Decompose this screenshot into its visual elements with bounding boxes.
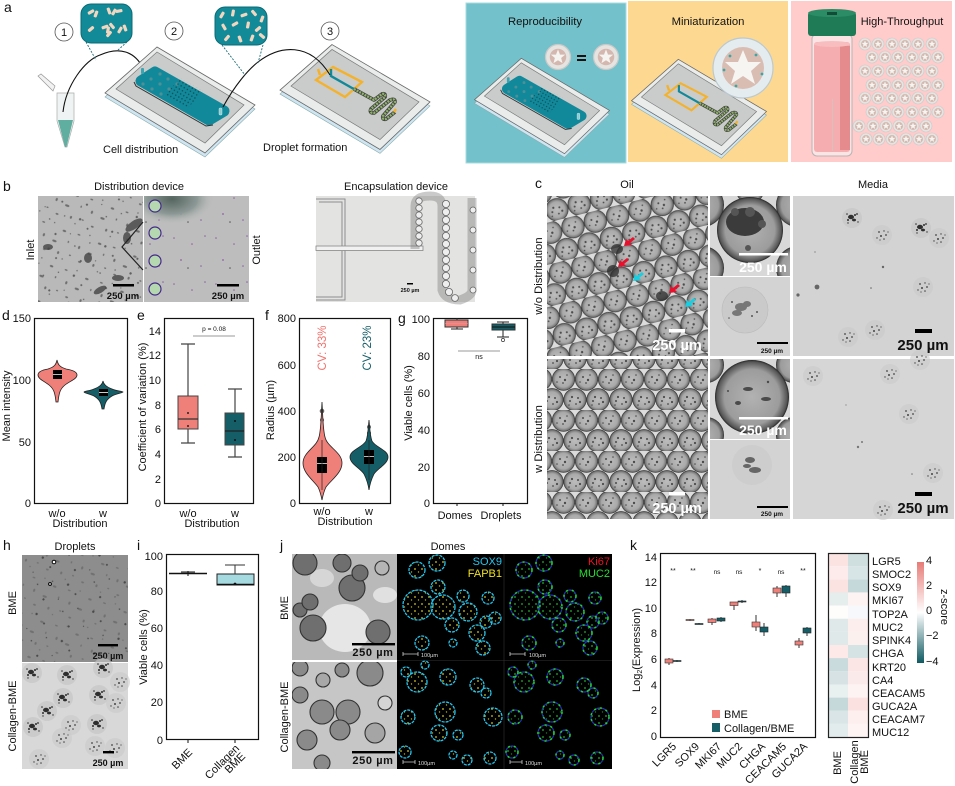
panel j: dome micrographs — [279, 537, 612, 771]
chart e: coefficient of variation boxplot: 12 — [149, 350, 161, 362]
chart i: viable cells by matrix: 40 — [151, 660, 163, 672]
close-up: organoid in media, upper — [710, 277, 790, 356]
scale bar: oil upper — [652, 329, 702, 354]
panel b: device micrographs — [3, 174, 476, 302]
chart i: viable cells by matrix: BME — [223, 751, 248, 776]
step number 2 — [165, 22, 183, 40]
chart e: coefficient of variation boxplot: Coefficient of variation (%) — [137, 343, 149, 471]
chart k: expression boxplots: (Expression) — [631, 608, 643, 670]
tubing between devices — [223, 50, 330, 107]
micrograph: outlet: 250 µm — [212, 291, 244, 302]
heatmap k: z-scores: MKI67 — [872, 595, 904, 607]
channel labels: MUC2 — [579, 568, 610, 580]
chart f: radius violins: w/o — [312, 506, 331, 518]
channel labels: Ki67 — [588, 556, 610, 568]
panel j: dome micrographs: BME — [279, 596, 291, 620]
chart d: mean intensity violins: w/o — [47, 508, 66, 520]
chart g: viable cells domes vs droplets: 40 — [418, 425, 430, 437]
close-up: organoid in media, lower: 250 µm — [761, 511, 783, 518]
panel j: dome micrographs: Domes — [431, 541, 466, 553]
100 µm scale bars: 100µm — [418, 761, 435, 767]
chart f: radius violins: 600 — [278, 360, 296, 372]
chart d: mean intensity violins: 100 — [13, 375, 31, 387]
droplet formation device — [280, 45, 430, 153]
panel: miniaturization: Miniaturization — [672, 16, 744, 28]
chart f: radius violins — [265, 307, 390, 528]
heading: media: Media — [858, 179, 889, 191]
cell distribution device — [105, 47, 255, 157]
panel j: dome micrographs: Collagen-BME — [279, 682, 291, 752]
panel h: droplet micrographs: h — [3, 537, 11, 553]
chart i: viable cells by matrix — [137, 537, 258, 782]
chart k: expression boxplots: 0 — [651, 731, 657, 743]
chart k: expression boxplots: * — [759, 568, 762, 575]
chart f: radius violins: f — [265, 307, 269, 323]
chart e: coefficient of variation boxplot: 2 — [155, 474, 161, 486]
caption: droplet formation: Droplet formation — [263, 142, 347, 154]
chart g: viable cells domes vs droplets — [398, 310, 528, 522]
chart i: viable cells by matrix: 80 — [151, 586, 163, 598]
chart i: viable cells by matrix: 0 — [157, 735, 163, 747]
chart e: coefficient of variation boxplot: 6 — [155, 424, 161, 436]
chart k: expression boxplots: ** — [800, 568, 806, 575]
close-up: single droplet: 250 µm — [739, 422, 787, 438]
heading: oil: Oil — [620, 179, 634, 191]
chart g: viable cells domes vs droplets: g — [398, 310, 406, 326]
panel h: droplet micrographs: Collagen-BME — [7, 681, 19, 751]
panel h: droplet micrographs — [3, 537, 130, 769]
arrows: red and cyan — [618, 237, 696, 307]
chart i: viable cells by matrix: BME — [170, 747, 195, 772]
chart e: coefficient of variation boxplot: p = 0.08 — [202, 326, 226, 333]
heatmap k: z-scores: BME — [832, 751, 844, 775]
tubing from tube to device — [63, 51, 143, 112]
label: outlet: Outlet — [251, 235, 263, 265]
chart g: viable cells domes vs droplets: ns — [475, 354, 483, 361]
chart g: viable cells domes vs droplets: 0 — [424, 498, 430, 510]
heatmap k: z-scores: MUC12 — [872, 727, 909, 739]
micrograph: collagen-BME droplets: 250 µm — [93, 758, 123, 768]
chart k: expression boxplots: ** — [670, 568, 676, 575]
chart i: viable cells by matrix: Viable cells (%) — [138, 609, 150, 685]
micrograph: inlet — [38, 196, 144, 302]
chart k: expression boxplots: 6 — [651, 654, 657, 666]
chart f: radius violins: 200 — [278, 452, 296, 464]
chart i: viable cells by matrix: 100 — [145, 551, 163, 563]
inset: dispersed cells — [215, 7, 267, 75]
row label: without distribution: w/o Distribution — [533, 237, 545, 316]
chart g: viable cells domes vs droplets: 80 — [418, 351, 430, 363]
close-up: clustered droplet: 250 µm — [739, 259, 787, 275]
scale bar: oil lower: 250 µm — [652, 501, 702, 517]
100 µm scale bars — [403, 652, 546, 767]
step number 1 — [55, 23, 73, 41]
chart e: coefficient of variation boxplot: Distribution — [184, 518, 240, 530]
chart k: expression boxplots: CEACAM5 — [743, 741, 789, 786]
chart d: mean intensity violins: w — [98, 508, 107, 520]
100 µm scale bars: 100µm — [529, 653, 546, 659]
100 µm scale bars: 100µm — [421, 653, 438, 659]
close-up: organoid in media, lower — [710, 440, 790, 519]
media micrograph lower — [793, 350, 954, 520]
chart k: expression boxplots: MKI67 — [693, 741, 724, 772]
chart f: radius violins: CV: 23% — [362, 326, 374, 370]
legend: Collagen/BME — [724, 723, 794, 735]
chart k: expression boxplots: ns — [714, 569, 721, 576]
micrograph: collagen-BME droplets — [22, 658, 130, 769]
chart d: mean intensity violins: 150 — [13, 313, 31, 325]
row label: with distribution: w Distribution — [533, 405, 545, 474]
chart g: viable cells domes vs droplets: 60 — [418, 388, 430, 400]
label: inlet: Inlet — [25, 240, 37, 260]
heatmap k: z-scores: CEACAM7 — [872, 714, 925, 726]
colorbar: 4 — [926, 555, 932, 567]
chart k: expression boxplots: 2 — [637, 670, 644, 674]
step number 3 — [321, 22, 339, 40]
chart d: mean intensity violins — [1, 307, 128, 530]
panel h: droplet micrographs: BME — [7, 591, 19, 615]
chart g: viable cells domes vs droplets: 20 — [418, 462, 430, 474]
panel h: droplet micrographs: Droplets — [55, 541, 96, 553]
step number 1: 1 — [61, 27, 67, 39]
close-up: organoid in media, upper: 250 µm — [761, 348, 783, 355]
chart e: coefficient of variation boxplot: 4 — [155, 449, 161, 461]
chart g: viable cells domes vs droplets: Viable cells (%) — [403, 365, 415, 441]
heatmap k: z-scores: LGR5 — [872, 556, 901, 568]
icon: centrifuge tube — [38, 74, 74, 147]
close-up: clustered droplet — [710, 196, 790, 276]
panel: miniaturization — [628, 1, 788, 162]
chart e: coefficient of variation boxplot: 10 — [149, 375, 161, 387]
brightfield: BME: 250 µm — [352, 647, 394, 659]
icon: vial — [808, 9, 856, 156]
heatmap k: z-scores: KRT20 — [872, 662, 906, 674]
media micrograph lower: 250 µm — [897, 500, 949, 517]
panel letter c: c — [535, 175, 542, 191]
chart k: expression boxplots — [630, 537, 816, 786]
inset: cell clusters — [81, 4, 132, 60]
colorbar: 2 — [926, 580, 932, 592]
heading: encapsulation device: Encapsulation device — [344, 181, 448, 193]
close-up: single droplet — [710, 359, 790, 439]
chart d: mean intensity violins: 50 — [19, 437, 31, 449]
heatmap k: z-scores: SPINK4 — [872, 635, 911, 647]
colorbar: −2 — [926, 630, 939, 642]
heatmap k: z-scores: TOP2A — [872, 609, 909, 621]
channel labels: FAPB1 — [468, 568, 502, 580]
chart e: coefficient of variation boxplot: 0 — [155, 498, 161, 510]
chart g: viable cells domes vs droplets: Droplets — [481, 510, 522, 522]
chart i: viable cells by matrix: Collagen — [203, 743, 242, 782]
chart k: expression boxplots: 14 — [645, 552, 657, 564]
micrograph: encapsulation channel — [316, 196, 476, 302]
heatmap k: z-scores: GUCA2A — [872, 701, 918, 713]
chart k: expression boxplots: SOX9 — [673, 741, 702, 770]
heatmap k: z-scores: SOX9 — [872, 582, 901, 594]
chart e: coefficient of variation boxplot: w — [230, 508, 239, 520]
chart d: mean intensity violins: d — [2, 307, 10, 323]
chart k: expression boxplots: MUC2 — [715, 741, 745, 771]
chart k: expression boxplots: ** — [690, 568, 696, 575]
chart f: radius violins: CV: 33% — [317, 326, 329, 370]
chart k: expression boxplots: k — [630, 537, 638, 553]
chart f: radius violins: w — [364, 506, 373, 518]
heatmap k: z-scores: CEACAM5 — [872, 688, 925, 700]
chart e: coefficient of variation boxplot: 8 — [155, 400, 161, 412]
panel: reproducibility: Reproducibility — [508, 16, 582, 28]
heading: distribution device: Distribution device — [94, 181, 184, 193]
scale bar: oil upper: 250 µm — [652, 338, 702, 354]
brightfield: collagen-BME: 250 µm — [352, 755, 394, 767]
chart e: coefficient of variation boxplot — [137, 307, 254, 530]
chart e: coefficient of variation boxplot: e — [137, 307, 145, 323]
media micrograph upper: 250 µm — [897, 337, 949, 354]
micrograph: inlet: 250 µm — [107, 291, 139, 302]
panel: high-throughput: High-Throughput — [861, 16, 943, 28]
brightfield: BME — [292, 551, 397, 660]
droplet grid — [853, 38, 944, 145]
chart d: mean intensity violins: 0 — [25, 498, 31, 510]
chart k: expression boxplots: ns — [778, 569, 785, 576]
chart k: expression boxplots: Log — [631, 674, 643, 692]
chart k: expression boxplots: CHGA — [737, 740, 769, 772]
caption: cell distribution: Cell distribution — [103, 144, 178, 156]
chart k: expression boxplots: 8 — [651, 628, 657, 640]
chart k: expression boxplots: 10 — [645, 603, 657, 615]
colorbar: 0 — [926, 605, 932, 617]
fluorescence: SOX9 FAPB1 and Ki67 MUC2 — [397, 554, 612, 769]
heatmap k: z-scores: CHGA — [872, 648, 904, 660]
step number 2: 2 — [171, 26, 177, 38]
micrograph: encapsulation channel: 250 µm — [401, 288, 419, 294]
channel labels — [468, 557, 610, 577]
heatmap k: z-scores: MUC2 — [872, 622, 903, 634]
chart f: radius violins: 800 — [278, 313, 296, 325]
legend — [712, 709, 794, 735]
panel: high-throughput — [791, 1, 952, 162]
chart e: coefficient of variation boxplot: 14 — [149, 326, 161, 338]
colorbar: −4 — [926, 656, 939, 668]
chart i: viable cells by matrix: 20 — [151, 697, 163, 709]
micrograph: BME droplets — [22, 555, 128, 662]
chart f: radius violins: Distribution — [317, 516, 373, 528]
chart f: radius violins: 0 — [290, 498, 296, 510]
chart d: mean intensity violins: Distribution — [52, 518, 108, 530]
100 µm scale bars: 100µm — [525, 761, 542, 767]
step number 3: 3 — [327, 26, 333, 38]
panel: reproducibility — [466, 3, 626, 163]
legend: BME — [724, 709, 748, 721]
heatmap k: z-scores: BME — [859, 750, 871, 774]
heatmap k: z-scores: Collagen — [849, 740, 861, 784]
heatmap k: z-scores — [828, 553, 950, 784]
chart d: mean intensity violins: Mean intensity — [1, 370, 13, 441]
chart k: expression boxplots: GUCA2A — [770, 740, 811, 781]
colorbar: z-score — [938, 589, 950, 625]
channel labels: SOX9 — [473, 556, 502, 568]
chart k: expression boxplots: 4 — [651, 680, 657, 692]
chart e: coefficient of variation boxplot: w/o — [178, 508, 197, 520]
chart k: expression boxplots: LGR5 — [650, 741, 679, 769]
chart f: radius violins: Radius (µm) — [265, 380, 277, 440]
droplets in oil without distribution — [547, 196, 708, 356]
colorbar — [917, 555, 950, 668]
brightfield: collagen-BME — [292, 660, 397, 771]
micrograph: BME droplets: 250 µm — [93, 651, 123, 661]
scale bar: oil lower — [652, 492, 702, 517]
chart g: viable cells domes vs droplets: Domes — [438, 510, 473, 522]
chart i: viable cells by matrix: i — [137, 537, 140, 553]
heatmap k: z-scores: CA4 — [872, 675, 893, 687]
micrograph: outlet — [144, 196, 249, 302]
panel j: dome micrographs: j — [279, 537, 283, 553]
chart k: expression boxplots: 12 — [645, 577, 657, 589]
chart f: radius violins: 400 — [278, 406, 296, 418]
panel c: droplet micrographs — [534, 180, 954, 520]
media micrograph upper — [793, 196, 954, 356]
chart i: viable cells by matrix: 60 — [151, 623, 163, 635]
chart k: expression boxplots: 2 — [651, 705, 657, 717]
panel a: workflow schematic — [4, 0, 430, 157]
droplets in oil with distribution — [547, 359, 708, 519]
chart k: expression boxplots: ns — [736, 569, 743, 576]
panel letter b: b — [3, 178, 11, 194]
chart g: viable cells domes vs droplets: 100 — [412, 314, 430, 326]
heatmap k: z-scores: SMOC2 — [872, 569, 911, 581]
